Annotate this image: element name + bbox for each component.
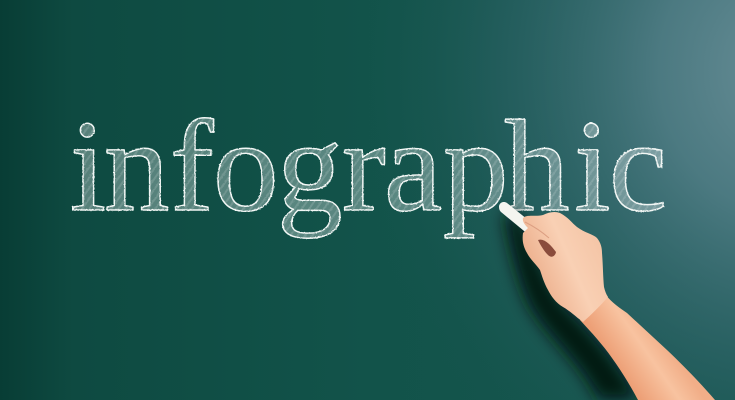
forearm [580, 295, 715, 400]
finger gap [538, 240, 556, 257]
hand shadow [503, 212, 640, 400]
finger crease [525, 222, 549, 238]
chalk stick [499, 202, 548, 245]
chalk word: infographic: infographic [70, 94, 667, 239]
hand [523, 212, 608, 322]
hand and forearm [523, 212, 715, 400]
